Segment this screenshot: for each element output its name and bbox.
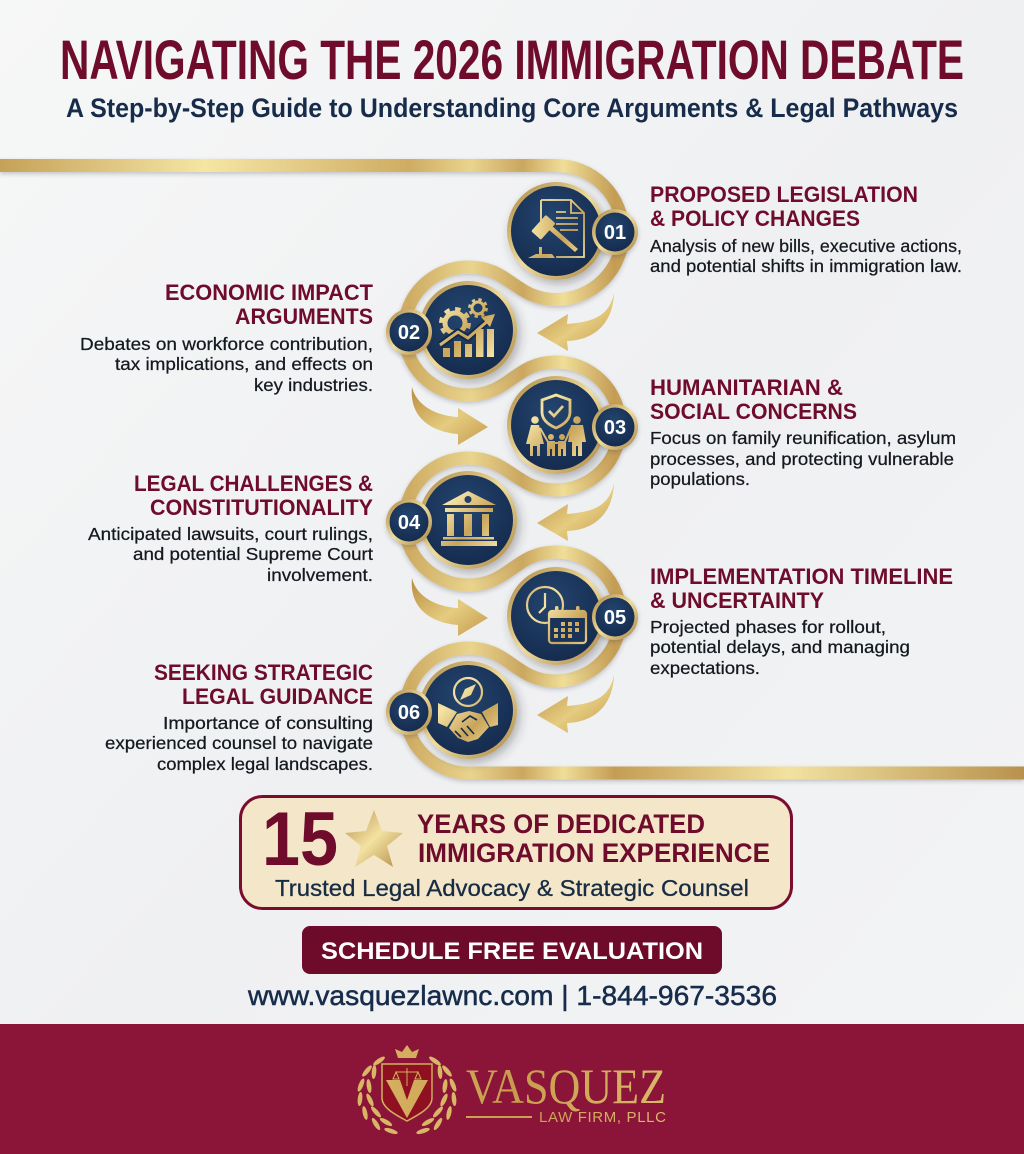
step 04 text xyxy=(88,471,373,585)
step 02 text: tax implications, and effects on xyxy=(115,354,373,374)
arrow: step 4 to 5 xyxy=(412,578,488,636)
step 02 text: ARGUMENTS xyxy=(235,304,373,329)
footer band xyxy=(0,1024,1024,1154)
arrow: step 5 to 6 xyxy=(537,675,614,733)
step 02 node xyxy=(386,281,517,379)
badge number 04: 04 xyxy=(398,512,421,534)
badge number 02: 02 xyxy=(398,322,420,344)
logo divider and firm type: LAW FIRM, PLLC xyxy=(539,1109,666,1126)
step 03 text xyxy=(650,375,956,489)
step 02 text: ECONOMIC IMPACT xyxy=(165,280,374,305)
step 06 text xyxy=(105,660,373,774)
step 05 text xyxy=(650,564,953,678)
step 05 node xyxy=(507,567,638,665)
step 03 text: SOCIAL CONCERNS xyxy=(650,399,857,424)
step 01 text: & POLICY CHANGES xyxy=(650,206,860,231)
logo shield xyxy=(382,1064,432,1121)
step 03 node xyxy=(507,376,638,474)
step 06 text: Importance of consulting xyxy=(163,713,373,733)
step 03 text: processes, and protecting vulnerable xyxy=(650,449,954,469)
step 03 text: populations. xyxy=(650,469,750,489)
step 04 text: LEGAL CHALLENGES & xyxy=(134,471,373,496)
step 02 text: Debates on workforce contribution, xyxy=(80,334,373,354)
step 05 text: Projected phases for rollout, xyxy=(650,617,886,637)
logo wordmark: VASQUEZ xyxy=(466,1058,666,1114)
call-to-action button xyxy=(302,926,722,974)
step 03 text: HUMANITARIAN & xyxy=(650,375,843,400)
arrow: step 1 to 2 xyxy=(537,293,614,351)
step 06 text: SEEKING STRATEGIC xyxy=(154,660,373,685)
icon: gold star xyxy=(345,810,403,867)
step 05 text: & UNCERTAINTY xyxy=(650,588,824,613)
badge number 03: 03 xyxy=(604,417,626,439)
step 01 text: PROPOSED LEGISLATION xyxy=(650,182,918,207)
step 06 text: LEGAL GUIDANCE xyxy=(182,684,373,709)
arrow: step 3 to 4 xyxy=(537,483,614,541)
experience heading: IMMIGRATION EXPERIENCE xyxy=(418,838,770,868)
experience tagline: Trusted Legal Advocacy & Strategic Counsel xyxy=(275,875,749,901)
step 02 text: key industries. xyxy=(254,375,373,395)
step 02 text xyxy=(80,280,374,395)
icon: shield and family xyxy=(526,395,586,456)
experience panel xyxy=(240,796,792,908)
website and phone: www.vasquezlawnc.com | 1-844-967-3536 xyxy=(247,980,777,1011)
icon: gears and growth chart xyxy=(440,300,495,357)
step 06 text: experienced counsel to navigate xyxy=(105,733,373,753)
subtitle: A Step-by-Step Guide to Understanding Core Arguments & Legal Pathways xyxy=(66,93,958,123)
logo wreath xyxy=(356,1055,458,1135)
logo crown xyxy=(395,1045,419,1058)
badge number 05: 05 xyxy=(604,607,626,629)
gold winding ribbon xyxy=(0,166,1024,773)
icon: clock and calendar xyxy=(527,587,586,643)
step 04 node xyxy=(386,471,517,569)
step 06 text: complex legal landscapes. xyxy=(157,754,373,774)
step 05 text: expectations. xyxy=(650,658,760,678)
icon: document and gavel xyxy=(528,200,584,258)
step 01 text xyxy=(650,182,962,276)
step 03 text: Focus on family reunification, asylum xyxy=(650,428,956,448)
step 01 text: and potential shifts in immigration law. xyxy=(650,256,962,276)
experience heading: YEARS OF DEDICATED xyxy=(417,809,705,839)
step 05 text: potential delays, and managing xyxy=(650,637,910,657)
step 01 node xyxy=(507,182,638,280)
step 04 text: Anticipated lawsuits, court rulings, xyxy=(88,524,373,544)
call-to-action button: SCHEDULE FREE EVALUATION xyxy=(321,938,703,965)
logo xyxy=(356,1045,666,1135)
icon: compass and handshake xyxy=(438,678,498,742)
number 15: 15 xyxy=(262,797,338,882)
step 01 text: Analysis of new bills, executive actions, xyxy=(650,236,962,256)
step 04 text: CONSTITUTIONALITY xyxy=(150,495,373,520)
arrow: step 2 to 3 xyxy=(412,387,488,445)
step 06 node xyxy=(386,661,517,759)
step 04 text: and potential Supreme Court xyxy=(133,544,373,564)
experience heading xyxy=(417,809,770,868)
icon: courthouse xyxy=(441,491,497,546)
step 04 text: involvement. xyxy=(267,565,373,585)
badge number 06: 06 xyxy=(398,702,420,724)
badge number 01: 01 xyxy=(604,222,626,244)
step 05 text: IMPLEMENTATION TIMELINE xyxy=(650,564,953,589)
